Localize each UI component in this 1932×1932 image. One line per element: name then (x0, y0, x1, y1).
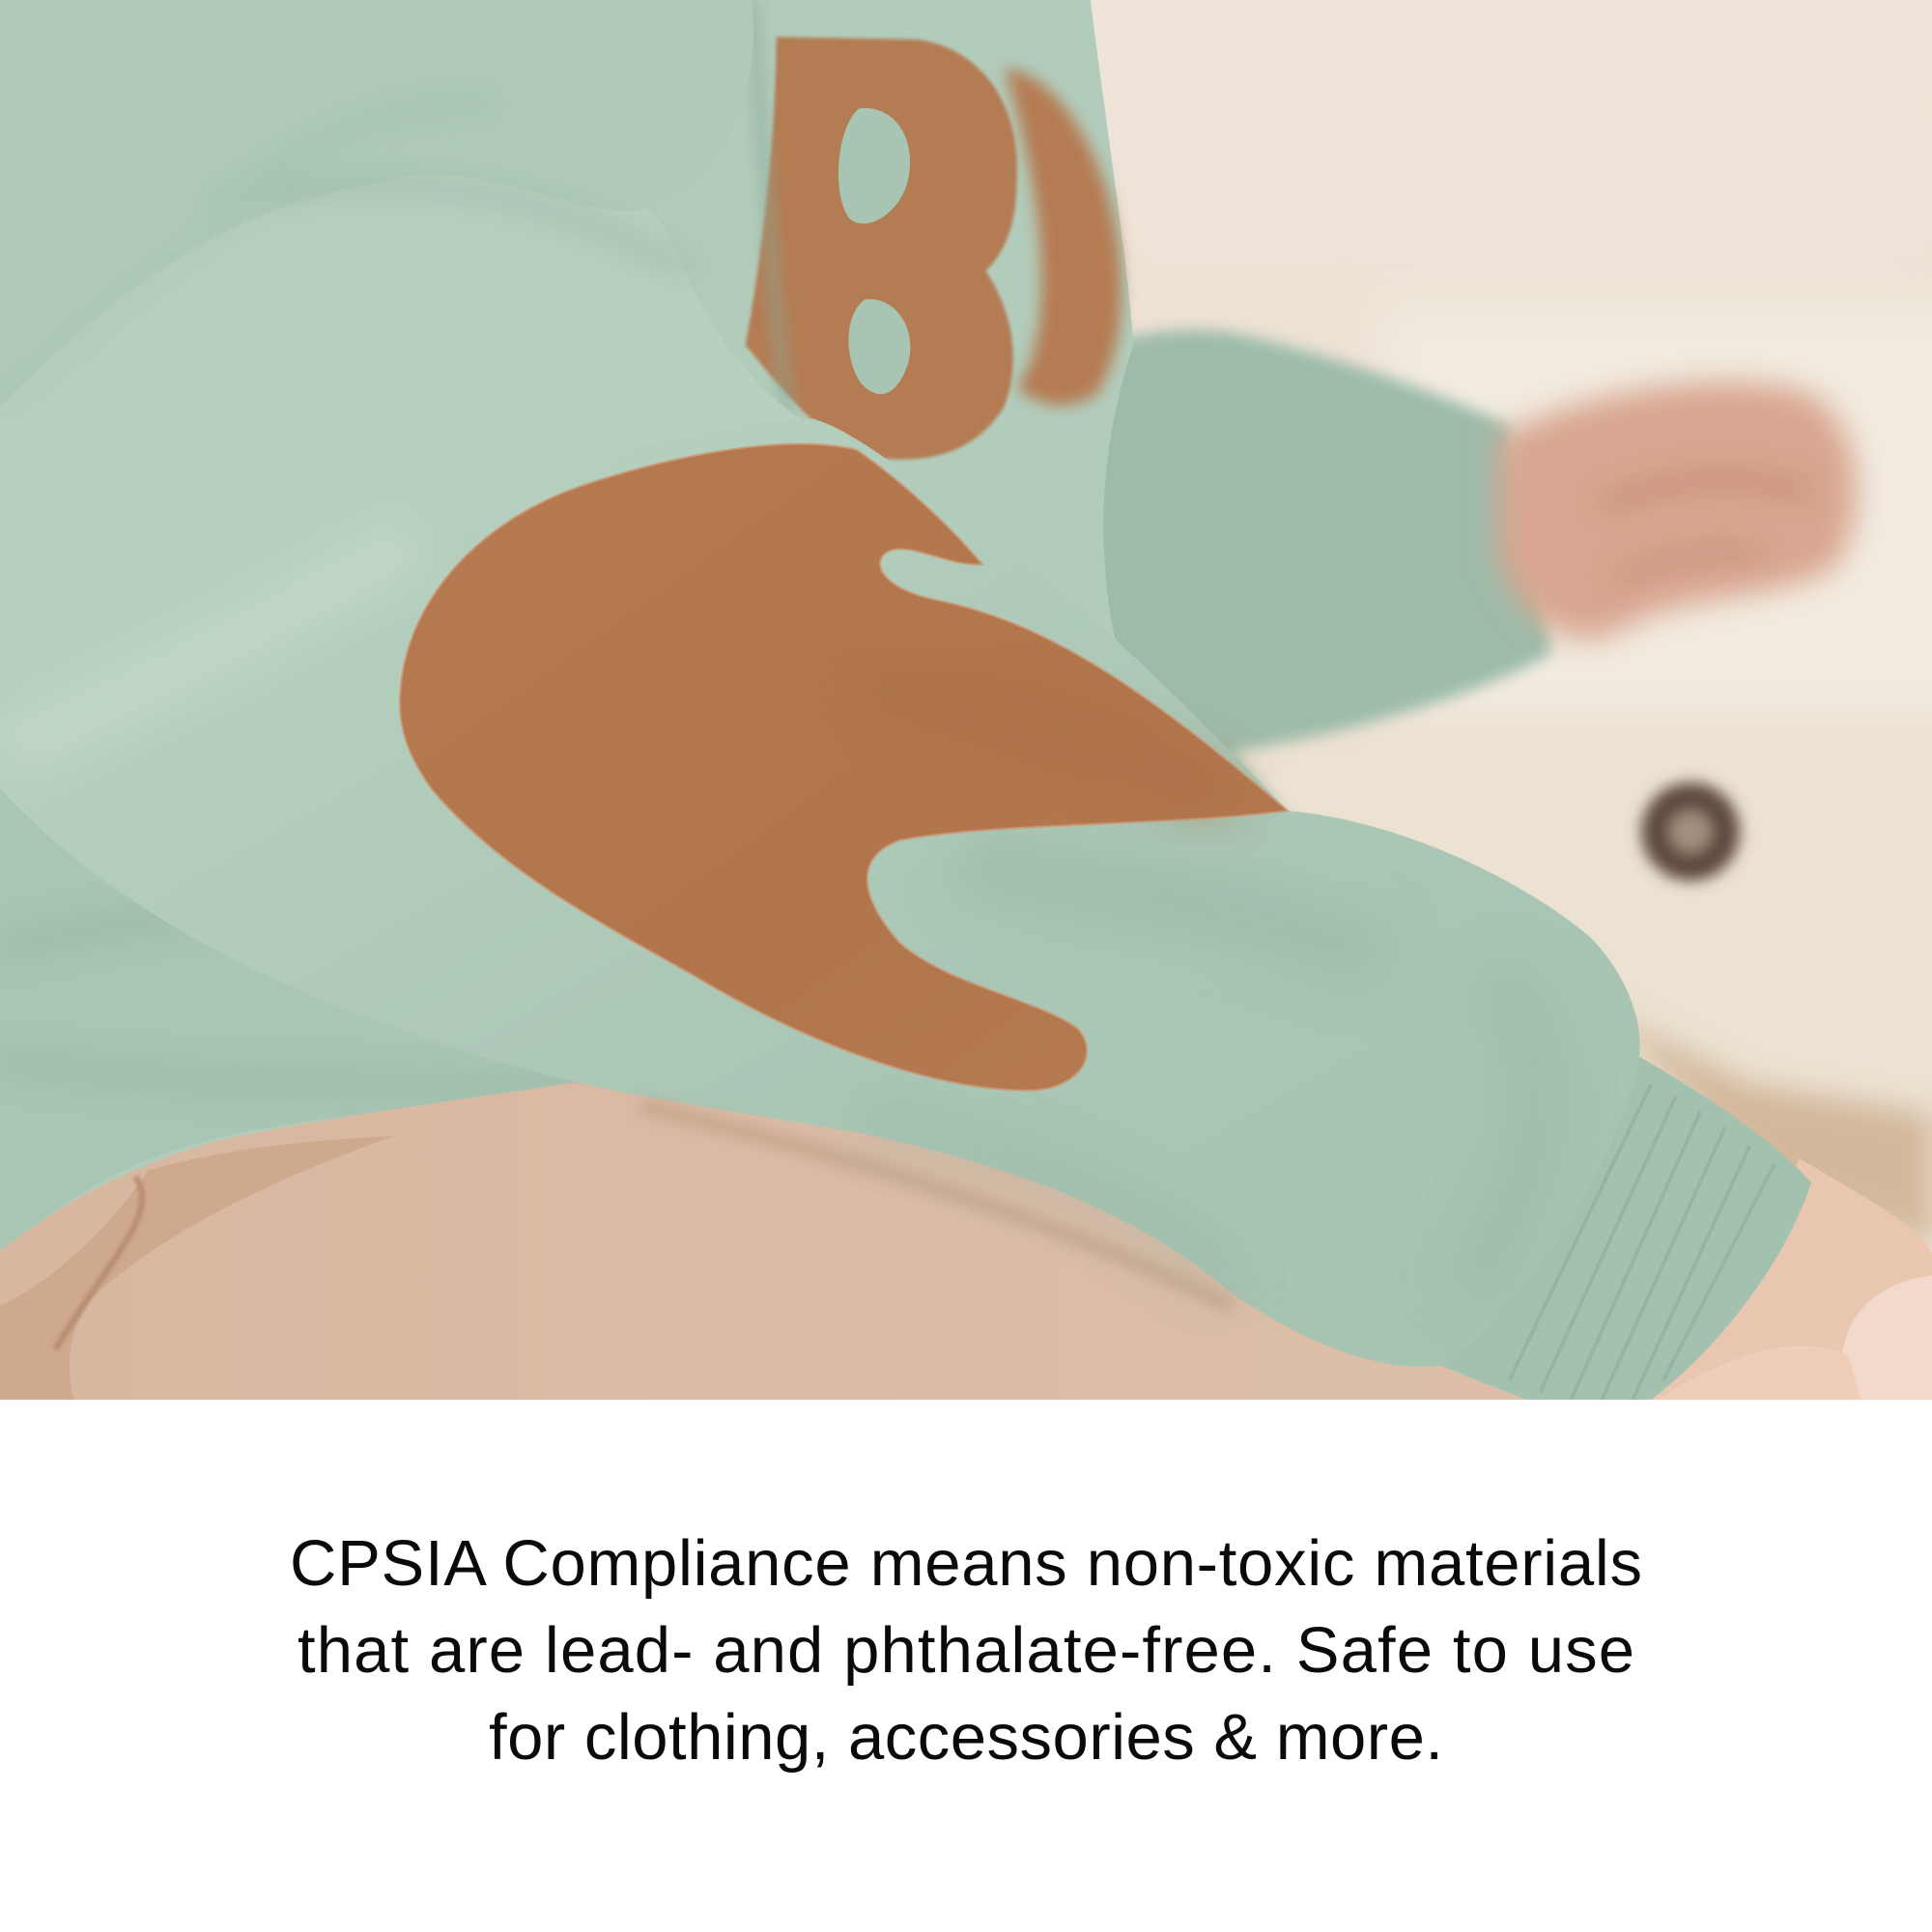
blurred hand (1497, 382, 1857, 639)
foot (1652, 1158, 1932, 1400)
ribbed cuff (1441, 1057, 1811, 1400)
caption line 3: for clothing, accessories & more. (489, 1701, 1443, 1774)
blurred far arm sleeve (1103, 321, 1559, 811)
pants shadow beneath sleeve (640, 1105, 1233, 1306)
pants (0, 1072, 1540, 1400)
photo: baby sleeve with elbow patch (0, 0, 1932, 1400)
caption line 1: CPSIA Compliance means non-toxic materials (290, 1527, 1642, 1600)
lower torso (0, 788, 508, 1250)
fabric fold shadows (281, 176, 677, 267)
caption text block (290, 1527, 1642, 1774)
caption line 2: that are lead- and phthalate-free. Safe to use (298, 1614, 1634, 1687)
torso shadow seam (752, 0, 788, 419)
printed letters on sweatshirt (746, 37, 1122, 459)
torso sweatshirt (0, 0, 1133, 1251)
blurred background wall (0, 0, 1932, 1400)
elbow patch (400, 444, 1288, 1091)
icon: blurred wooden button (1641, 782, 1740, 881)
sleeve shading (0, 542, 1539, 1293)
patch shading (863, 690, 1233, 801)
main sleeve (0, 419, 1640, 1367)
near arm upper sleeve (771, 396, 799, 421)
